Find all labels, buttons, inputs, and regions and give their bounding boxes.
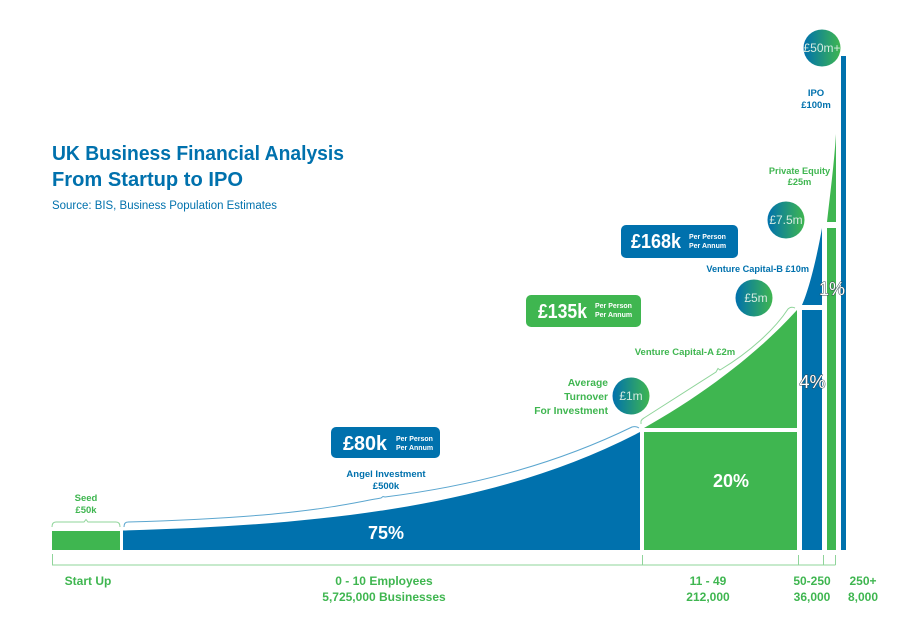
- 11-49: 11 - 49: [690, 574, 727, 588]
- 168k badge: £168k: [631, 231, 682, 253]
- 168k badge: [621, 225, 738, 258]
- green column: [827, 228, 836, 550]
- seed segment: [52, 493, 120, 550]
- circle: 50m+: [803, 30, 841, 66]
- seed label: Seed: [75, 493, 98, 504]
- venture A bracket: [641, 307, 795, 424]
- 80k badge: Per Person: [396, 436, 433, 443]
- 80k badge: Per Annum: [396, 445, 433, 452]
- venture A label: Venture Capital-A £2m: [635, 347, 735, 358]
- 135k badge: Per Person: [595, 303, 632, 310]
- 250+: 8,000: [848, 590, 878, 604]
- 50-250 area: [706, 228, 826, 550]
- private equity label: Private Equity: [769, 166, 831, 176]
- circle: 7.5m: [768, 202, 804, 238]
- axis labels: [65, 574, 878, 604]
- green curve area: [644, 310, 797, 428]
- 0-10 employees: 0 - 10 Employees: [335, 574, 433, 588]
- 80k badge: £80k: [343, 433, 388, 455]
- IPO label: £100m: [801, 100, 831, 111]
- green lower block: [644, 432, 797, 550]
- source text: Source: BIS, Business Population Estimates: [52, 200, 277, 212]
- 135k badge: Per Annum: [595, 312, 632, 319]
- angel label: Angel Investment: [346, 469, 426, 480]
- 1 percent: 1%: [819, 279, 845, 299]
- circle: 1m: [612, 378, 650, 414]
- 168k badge: Per Annum: [689, 243, 726, 250]
- bottom axis bracket: [52, 554, 836, 565]
- blue curve area: [802, 228, 822, 305]
- 11-49: 212,000: [686, 590, 730, 604]
- 250+: 250+: [849, 574, 877, 588]
- 168k badge: Per Person: [689, 234, 726, 241]
- circle: 1m: £1m: [619, 389, 643, 403]
- circle: 7.5m: £7.5m: [769, 213, 803, 227]
- green spike: [827, 134, 836, 222]
- angel label: £500k: [373, 481, 400, 492]
- 0-10 employees: 5,725,000 Businesses: [322, 590, 446, 604]
- venture B label: Venture Capital-B £10m: [706, 264, 809, 274]
- circle: 5m: £5m: [744, 291, 768, 305]
- 75 percent: 75%: [368, 523, 404, 543]
- 4 percent: 4%: [799, 372, 826, 392]
- seed label: £50k: [75, 505, 97, 516]
- private equity label: £25m: [788, 177, 811, 187]
- circle: 5m: [736, 280, 772, 316]
- 250 plus green area: [769, 134, 836, 550]
- 50-250: 36,000: [794, 590, 831, 604]
- 11-49 area: [635, 307, 797, 550]
- 50-250: 50-250: [793, 574, 831, 588]
- title: UK Business Financial Analysis: [52, 143, 344, 165]
- seed bracket: [52, 520, 120, 527]
- average turnover label: Turnover: [564, 392, 608, 403]
- blue lower block: [802, 310, 822, 550]
- title: From Startup to IPO: [52, 169, 243, 191]
- 80k badge: [331, 427, 440, 458]
- IPO label: IPO: [808, 88, 824, 99]
- blue area: [123, 432, 640, 550]
- title: [52, 143, 344, 191]
- average turnover label: For Investment: [534, 406, 609, 417]
- 135k badge: [526, 295, 641, 327]
- 135k badge: £135k: [538, 301, 588, 323]
- average turnover label: Average: [568, 378, 608, 389]
- IPO column: [801, 56, 846, 550]
- 20 percent: 20%: [713, 471, 749, 491]
- 0-10 employees area: [123, 427, 640, 550]
- start up: Start Up: [65, 574, 111, 588]
- circle: 50m+: £50m+: [803, 41, 841, 55]
- seed bar: [52, 531, 120, 550]
- angel bracket: [124, 427, 639, 527]
